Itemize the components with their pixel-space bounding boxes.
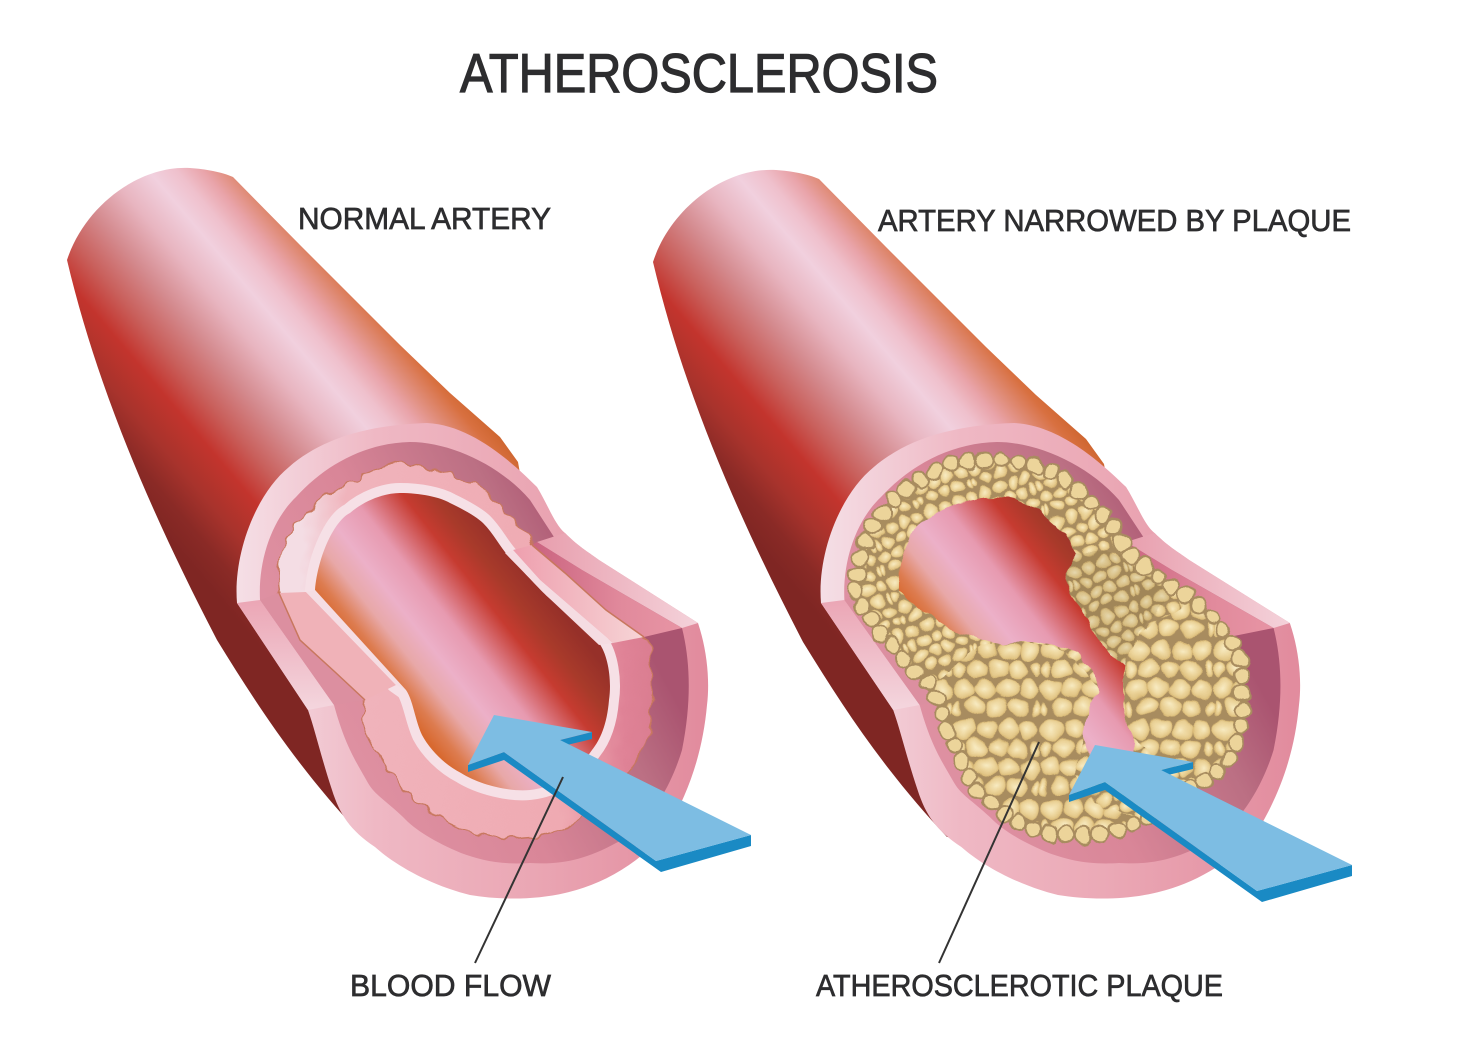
outer wall layer [237,423,708,899]
left cut face [237,590,406,710]
right cut face [1094,533,1290,645]
open lumen [315,493,610,790]
artery tube [67,168,560,835]
artery cross section [237,423,708,899]
left cut face [821,590,987,710]
leader line: blood flow [475,777,563,963]
label: blood flow: BLOOD FLOW [350,968,552,1003]
label: normal artery: NORMAL ARTERY [298,201,551,236]
label: atherosclerotic plaque: ATHEROSCLEROTIC PLAQUE [816,968,1223,1003]
right cut face [505,533,698,645]
arrow: blood flow [468,715,751,872]
middle wall [844,442,1280,863]
middle wall layer [260,442,689,863]
plaque [856,459,1243,835]
label: artery narrowed by plaque: ARTERY NARROWED BY PLAQUE [878,203,1351,238]
panel: normal artery [67,168,751,1003]
panel: artery narrowed by plaque [653,170,1352,1003]
outer wall [821,423,1300,899]
arrow: restricted blood flow [1069,745,1352,902]
narrowed lumen [899,497,1135,765]
narrowed artery tube [653,170,1146,837]
leader line: plaque [939,742,1039,963]
narrowed artery wall section [821,423,1300,899]
wavy inner wall layer [278,462,654,838]
title: ATHEROSCLEROSIS [460,42,938,104]
